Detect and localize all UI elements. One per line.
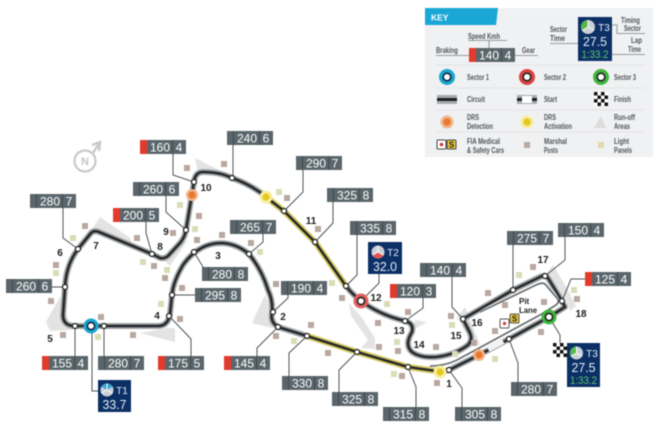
corner numbers: 7 (93, 241, 99, 252)
speed box: 275 7: 275 (517, 232, 537, 246)
corner numbers: 16 (471, 318, 483, 329)
corner numbers: 4 (154, 311, 160, 322)
speed box: 305 8 (455, 407, 501, 422)
speed box: 200 5: 200 (123, 208, 143, 222)
key row: cars and posts: FIA Medical (467, 137, 500, 146)
key row: cars and posts: Posts (544, 146, 558, 155)
sector badge T3: 27.5 (572, 360, 596, 375)
speed box: 125 4: 4 (621, 272, 628, 286)
speed box: 335 8: 8 (386, 222, 393, 236)
speed box: 260 6 left (6, 279, 52, 294)
speed box: 150 4: 150 (568, 224, 588, 238)
speed box: 280 7 straight (511, 382, 557, 396)
key row: DRS and run-off: Areas (614, 122, 630, 131)
key row: DRS and run-off: Activation (544, 122, 572, 131)
light panels (53, 189, 577, 377)
key example speed box (469, 48, 515, 62)
speed box: 295 8: 295 (205, 288, 225, 302)
speed box: 315 8: 315 (393, 408, 413, 422)
key example speed box: 4 (505, 48, 512, 62)
corner numbers: 17 (537, 255, 549, 266)
speed box: 260 6 left: 260 (16, 280, 36, 294)
speed box: 325 8 lower: 8 (368, 392, 375, 406)
speed box: 290 7 (296, 156, 342, 170)
key annotations: Braking (436, 46, 458, 55)
sector badge T2: T2 (387, 248, 399, 259)
speed box: 190 4 (281, 281, 327, 296)
key row: circuit, start, finish (437, 92, 631, 106)
speed box: 175 5: 5 (194, 356, 201, 370)
circuit track (63, 172, 565, 371)
speed box: 240 6: 240 (237, 132, 257, 146)
speed box: 200 5 (113, 208, 159, 222)
marker: DRS detection T10 (186, 189, 198, 201)
key tab heading (425, 8, 498, 25)
sector badge T1 (98, 380, 131, 412)
key annotations (436, 16, 645, 56)
key row: cars and posts: & Safety Cars (467, 146, 504, 155)
speed box: 335 8: 335 (360, 222, 380, 236)
speed box: 275 7: 7 (543, 232, 550, 246)
speed box: 190 4: 4 (317, 282, 324, 296)
key row: cars and posts: Marshal (544, 137, 567, 146)
speed box: 265 7: 7 (266, 220, 273, 234)
icon: safety car (510, 314, 519, 324)
key example sector badge: 27.5 (583, 34, 607, 49)
speed box: 240 6 (227, 131, 273, 146)
speed box: 120 3: 3 (426, 284, 433, 298)
speed box: 280 7 T6: 280 (40, 194, 60, 208)
marker: sector 1 (84, 318, 98, 334)
speed box: 335 8 (350, 221, 396, 236)
marker: DRS activation main straight (434, 366, 446, 378)
corner numbers: 18 (575, 309, 587, 320)
corner numbers: 13 (393, 326, 405, 337)
speed box: 120 3 (390, 284, 436, 298)
key example sector badge: T3 (598, 23, 610, 34)
speed box: 280 7 bottom: 280 (108, 356, 128, 370)
corner numbers: 2 (280, 312, 286, 323)
speed box: 280 7 straight: 7 (547, 382, 554, 396)
speed box: 305 8: 305 (465, 408, 485, 422)
icon: compass (74, 142, 100, 172)
speed box: 305 8: 8 (491, 408, 498, 422)
speed box: 315 8 (383, 407, 429, 422)
speed box: 260 6 left: 6 (42, 280, 49, 294)
marshal posts (48, 161, 580, 386)
key row: cars and posts: S (449, 140, 455, 150)
key row: sectors: Sector 2 (544, 73, 566, 82)
leader lines (51, 144, 585, 407)
speed box: 155 4: 155 (52, 356, 72, 370)
speed box: 160 4 (140, 140, 186, 154)
icon: compass: N (81, 156, 89, 168)
panel: key (425, 8, 653, 157)
speed box: 325 8 upper: 325 (337, 188, 357, 202)
marker: sector 2 (354, 294, 368, 308)
key tab heading: KEY (431, 12, 449, 22)
speed box: 265 7: 265 (240, 220, 260, 234)
corner numbers: 9 (163, 227, 169, 238)
speed box: 330 8: 8 (318, 376, 325, 390)
sector badge T3: 1:33.2 (570, 375, 597, 387)
key row: circuit, start, finish: Start (544, 95, 557, 104)
key example sector badge (578, 17, 612, 61)
key annotations: Gear (522, 46, 535, 55)
key row: cars and posts (437, 137, 632, 155)
speed box: 260 6 T9: 260 (143, 182, 163, 196)
speed box: 175 5: 175 (168, 356, 188, 370)
key annotations: Sector (624, 24, 641, 33)
corner numbers: 14 (413, 340, 425, 351)
speed box: 325 8 upper: 8 (363, 188, 370, 202)
corner numbers: 5 (47, 334, 53, 345)
marker: sector 3 (542, 310, 556, 324)
icon: FIA medical car (500, 319, 509, 328)
sector badge T3: T3 (586, 349, 598, 360)
key annotations: Lap (631, 36, 642, 45)
speed box: 175 5 (158, 356, 204, 370)
speed box: 145 4: 145 (234, 356, 254, 370)
key row: sectors (439, 69, 636, 85)
speed box: 155 4: 4 (78, 356, 85, 370)
speed box: 145 4 (224, 356, 270, 370)
key annotations: Time (550, 34, 565, 43)
speed box: 260 6 T9 (133, 182, 179, 196)
sector badge T3 (567, 343, 600, 387)
key example sector badge: 1:33.2 (582, 49, 608, 61)
speed box: 280 7 T6 (30, 194, 76, 208)
speed box: 330 8: 330 (292, 376, 312, 390)
key row: circuit, start, finish: Finish (614, 95, 631, 104)
icon: safety car: S (512, 314, 518, 324)
key annotations: Sector (550, 25, 567, 34)
speed box: 200 5: 5 (149, 208, 156, 222)
speed box: 240 6: 6 (263, 132, 270, 146)
speed box: 325 8 lower: 325 (342, 392, 362, 406)
speed box: 140 4: 4 (456, 264, 463, 278)
speed box: 125 4 (585, 272, 631, 286)
speed box: 275 7 (507, 231, 553, 246)
speed box: 280 8: 8 (238, 268, 245, 282)
sector badge T2 (368, 242, 402, 274)
key annotations: Timing (621, 16, 640, 25)
speed box: 265 7 (230, 220, 276, 234)
key row: DRS and run-off: Run-off (614, 113, 635, 122)
pit lane label: Lane (519, 306, 538, 315)
speed box: 295 8: 8 (231, 288, 238, 302)
corner numbers (47, 183, 587, 390)
corner numbers: 1 (446, 379, 452, 390)
key annotations: Time (628, 45, 641, 54)
speed box: 280 8: 280 (212, 268, 232, 282)
speed box: 280 7 straight: 280 (521, 382, 541, 396)
speed box: 140 4: 140 (430, 264, 450, 278)
key annotations: Speed Kmh (468, 32, 500, 41)
speed box: 280 7 bottom (98, 356, 144, 370)
speed box: 140 4 (420, 263, 466, 278)
speed box: 120 3: 120 (400, 284, 420, 298)
marker: DRS activation T10-T11 (260, 190, 272, 204)
key row: DRS and run-off: Detection (467, 122, 493, 131)
corner numbers: 6 (57, 248, 63, 259)
sector badge T1: 33.7 (102, 397, 126, 412)
speed box: 280 8 (202, 267, 248, 282)
sector badge T2: 32.0 (373, 259, 397, 274)
speed box: 160 4: 4 (176, 140, 183, 154)
corner numbers: 12 (370, 293, 382, 304)
key row: DRS and run-off: DRS (467, 113, 479, 122)
speed box: 325 8 upper (327, 188, 373, 202)
pit lane label (519, 297, 538, 315)
key row: DRS and run-off: DRS (544, 113, 556, 122)
speed box: 145 4: 4 (260, 356, 267, 370)
corner numbers: 3 (215, 251, 221, 262)
marker: DRS detection main straight (473, 349, 485, 361)
corner numbers: 15 (450, 331, 462, 342)
speed box: 190 4: 190 (291, 282, 311, 296)
speed box: 150 4: 4 (594, 224, 601, 238)
speed box: 260 6 T9: 6 (169, 182, 176, 196)
speed box: 150 4 (558, 223, 604, 238)
corner numbers: 8 (157, 242, 163, 253)
speed box: 290 7: 7 (332, 156, 339, 170)
key row: circuit, start, finish: Circuit (467, 95, 485, 104)
speed box: 295 8 (195, 288, 241, 302)
corner numbers: 10 (200, 183, 212, 194)
key example speed box: 140 (479, 48, 499, 62)
key row: sectors: Sector 1 (467, 73, 489, 82)
run-off areas (46, 158, 576, 349)
speed box: 325 8 lower (332, 392, 378, 406)
speed box: 160 4: 160 (150, 140, 170, 154)
corner numbers: 11 (306, 216, 317, 227)
key row: cars and posts: Panels (614, 146, 632, 155)
speed box: 280 7 T6: 7 (66, 194, 73, 208)
checkered flag (553, 343, 567, 357)
track nodes (62, 176, 564, 372)
key row: DRS and run-off (440, 113, 635, 131)
speed box: 125 4: 125 (595, 272, 615, 286)
speed box: 290 7: 290 (306, 156, 326, 170)
key row: sectors: Sector 3 (614, 73, 636, 82)
speed box: 280 7 bottom: 7 (134, 356, 141, 370)
speed box: 155 4 (42, 356, 88, 370)
speed box: 315 8: 8 (419, 408, 426, 422)
speed box: 330 8 (282, 376, 328, 390)
sector badge T1: T1 (116, 386, 128, 397)
key row: cars and posts: Light (614, 137, 629, 146)
pit lane label: Pit (519, 297, 530, 306)
